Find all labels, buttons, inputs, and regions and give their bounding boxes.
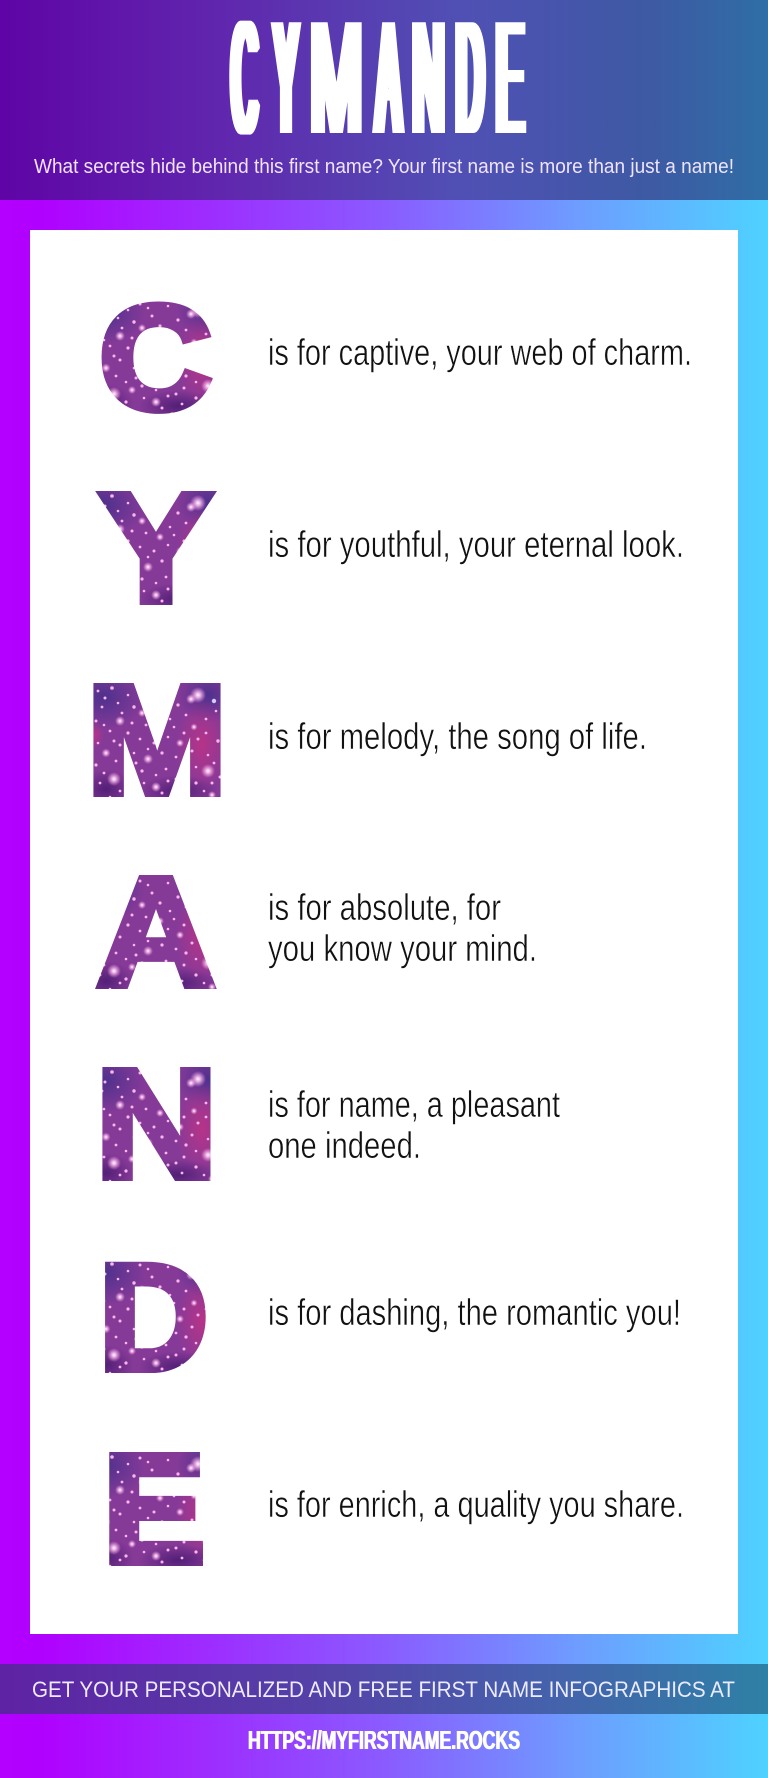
footer band <box>0 1664 768 1714</box>
row A <box>97 846 537 1018</box>
white content panel <box>30 230 738 1634</box>
row C <box>100 276 692 439</box>
text N: one indeed. <box>268 1125 421 1166</box>
text A: you know your mind. <box>268 928 537 969</box>
row Y <box>100 462 684 634</box>
subtitle: What secrets hide behind this first name? Your first name is more than just a name! <box>34 155 734 178</box>
letter D: D <box>99 1233 208 1401</box>
letter E: E <box>103 1423 205 1595</box>
letter M: M <box>86 654 228 826</box>
footer url: HTTPS://MYFIRSTNAME.ROCKS <box>248 1725 520 1755</box>
footer call to action: GET YOUR PERSONALIZED AND FREE FIRST NAME INFOGRAPHICS AT <box>32 1677 735 1702</box>
row D <box>99 1233 681 1401</box>
text N: is for name, a pleasant <box>268 1084 561 1125</box>
letter A: A <box>97 846 215 1018</box>
text M: is for melody, the song of life. <box>268 716 647 757</box>
letter N: N <box>96 1038 217 1210</box>
header band <box>0 0 768 200</box>
row E <box>103 1423 684 1595</box>
text A: is for absolute, for <box>268 887 501 928</box>
row N <box>96 1038 561 1210</box>
row M <box>86 654 647 826</box>
letter Y: Y <box>100 462 212 634</box>
letter C: C <box>100 276 211 439</box>
